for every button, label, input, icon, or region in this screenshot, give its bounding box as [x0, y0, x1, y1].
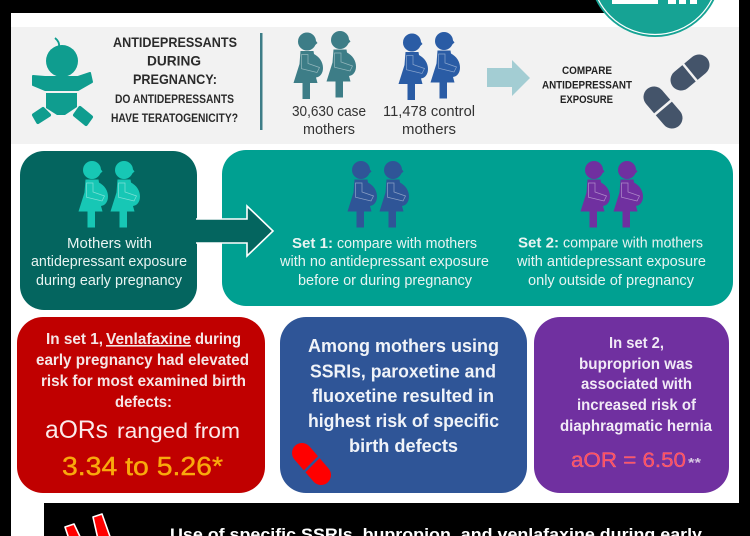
icon: baby	[33, 38, 92, 124]
text: set 1: compare with mothers	[337, 236, 477, 252]
label: control mothers	[383, 104, 475, 138]
text: SSRI result: highest risk of specific	[308, 411, 499, 431]
stat: bupropion aOR: **	[688, 455, 702, 470]
arrow: exposed to comparison	[196, 206, 273, 256]
stat: adjusted odds ratio range	[45, 416, 240, 481]
heading: study question: PREGNANCY:	[133, 71, 217, 87]
panel: bupropion result	[534, 317, 729, 493]
text: venlafaxine result: risk for most examined birth	[41, 373, 246, 390]
text: SSRI result	[308, 336, 499, 456]
stat: bupropion aOR: aOR = 6.50	[571, 448, 686, 472]
heading: study question: HAVE TERATOGENICITY?	[111, 112, 238, 125]
panel: study overview band	[11, 27, 739, 144]
label: compare exposure: COMPARE	[562, 65, 612, 77]
text: exposed mothers: during early pregnancy	[36, 273, 183, 289]
stat: adjusted odds ratio range: aORs	[45, 416, 108, 444]
arrow: light teal	[487, 60, 530, 96]
label: compare exposure: EXPOSURE	[560, 94, 613, 106]
text: set 1: before or during pregnancy	[298, 273, 473, 289]
text: bupropion result: associated with	[581, 376, 692, 393]
text: exposed mothers: antidepressant exposure	[31, 254, 187, 270]
label: case mothers: mothers	[303, 122, 355, 138]
text: set 2	[516, 236, 706, 289]
icon: dark capsules	[650, 62, 699, 118]
text: SSRI result: fluoxetine resulted in	[312, 386, 494, 406]
heading: study question: DURING	[147, 52, 201, 68]
icon: set 2 mothers	[580, 161, 643, 228]
label: control mothers: 11,478 control	[383, 104, 475, 120]
label: case mothers	[292, 104, 366, 138]
text: set 2: Set 2:	[518, 236, 559, 252]
text: set 1: with no antidepressant exposure	[279, 254, 489, 270]
label: control mothers: mothers	[402, 122, 456, 138]
text: bupropion result	[560, 335, 712, 435]
stat: adjusted odds ratio range: 3.34 to 5.26*	[62, 451, 223, 481]
panel: SSRI result	[280, 317, 527, 493]
text: bupropion result: increased risk of	[577, 397, 697, 414]
white lower left margin	[11, 503, 44, 536]
white upper right corner	[700, 0, 739, 14]
heading: study question: DO ANTIDEPRESSANTS	[115, 93, 234, 106]
icon: case mothers	[294, 31, 356, 99]
stat: adjusted odds ratio range: ranged from	[117, 420, 240, 443]
icon: control mothers	[398, 32, 460, 100]
label: case mothers: 30,630 case	[292, 104, 366, 120]
text: bupropion result: diaphragmatic hernia	[560, 418, 712, 435]
panel: comparison sets	[222, 150, 733, 306]
text: set 2: compare with mothers	[563, 236, 703, 252]
text: SSRI result: birth defects	[349, 436, 458, 456]
conclusion bar	[44, 503, 750, 536]
panel: exposed mothers	[20, 151, 197, 310]
text: venlafaxine result: during	[195, 331, 241, 348]
text: bupropion result: buproprion was	[579, 356, 693, 373]
text: venlafaxine result	[36, 331, 249, 411]
heading: study question	[111, 34, 238, 125]
label: compare exposure	[542, 65, 632, 106]
text: exposed mothers: Mothers with	[67, 236, 152, 252]
text: venlafaxine result: early pregnancy had elevated	[36, 352, 249, 369]
text: set 1	[279, 236, 489, 289]
text: set 2: with antidepressant exposure	[516, 254, 706, 270]
label: compare exposure: ANTIDEPRESSANT	[542, 80, 632, 92]
icon: exposed mothers	[78, 161, 140, 228]
text: exposed mothers	[31, 236, 187, 289]
text: set 2: only outside of pregnancy	[528, 273, 695, 289]
text: SSRI result: Among mothers using	[308, 336, 499, 356]
text: bupropion result: In set 2,	[609, 335, 664, 352]
icon: exclamation marks	[65, 514, 113, 536]
text: SSRI result: SSRIs, paroxetine and	[310, 362, 496, 382]
text: venlafaxine result: defects:	[115, 394, 172, 411]
divider	[260, 33, 262, 130]
text: venlafaxine result: In set 1,	[46, 331, 103, 348]
icon: set 1 mothers	[348, 161, 409, 228]
logo badge	[589, 0, 721, 37]
text: venlafaxine result: Venlafaxine	[106, 331, 191, 348]
panel: venlafaxine result	[17, 317, 265, 493]
heading: study question: ANTIDEPRESSANTS	[113, 34, 237, 50]
text: set 1: Set 1:	[292, 236, 333, 252]
icon: red capsule	[300, 453, 323, 476]
arrow shaft blend	[190, 220, 221, 242]
